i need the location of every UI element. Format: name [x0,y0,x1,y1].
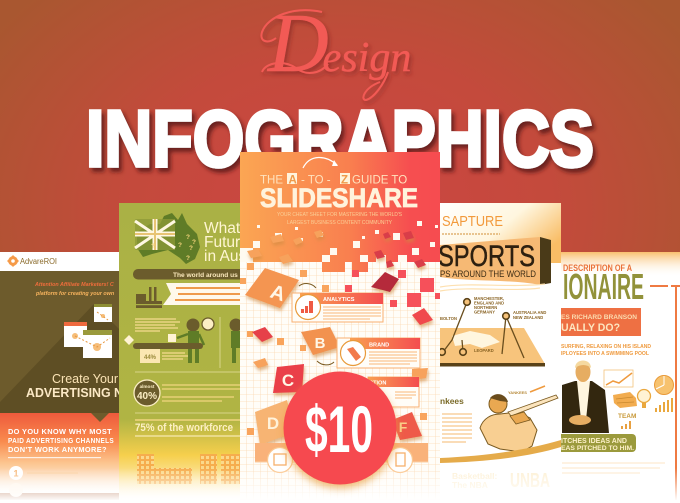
label: TEAM [618,413,636,429]
map platform with pins: AUSTRALIA AND [513,310,546,315]
arrow: A to analytics [299,284,316,288]
faded heading: Basketball: Basketball: [452,471,498,481]
map platform with pins: BOLTON [440,316,457,321]
map platform with pins: NORTHERN [474,305,497,310]
tile: A: A [267,281,288,306]
map of Australia with flag: ? [178,242,182,249]
illustration: baseball batter [480,386,558,452]
photo: Richard Branson [562,360,609,433]
intro text: Attention Affiliate Marketers! C [34,282,114,288]
banner: sports: SPORTS [438,240,535,273]
text: surfing: SURFING, RELAXING ON HIS ISLAND [561,344,651,350]
ribbon: revolution text [163,283,240,305]
stat: almost 40%: almost [140,384,155,389]
icon: light bulb [638,390,650,408]
decorative wave [440,440,561,463]
banner: sports [438,237,551,285]
tile: C [273,364,304,393]
panel: A to Z guide to SlideShare [240,152,440,503]
title: What Future in Aus [204,222,240,261]
faded heading: Basketball [452,473,550,488]
map platform with pins: NEW ZEALAND [513,315,543,320]
stat: almost 40%: 40% [137,391,157,402]
map of Australia with flag: ? [186,234,190,241]
icon: bars [655,398,673,412]
map of Australia with flag: ? [151,243,155,250]
tile: dark red [371,272,399,292]
heading: description of a billionaire [564,264,644,300]
title block: YOUR CHEAT SHEET FOR MASTERING THE WORLD'S [277,212,402,218]
tile: C: C [282,371,294,390]
factory worker scene: 44% [144,355,157,361]
title block: THE [260,174,283,186]
stat: 75% of the workforce: 75% of the workforce [135,422,233,434]
illustration: baseball batter: YANKEES [508,390,527,395]
title block [260,157,418,226]
heading: Yankees: nkees [440,396,464,406]
box: analytics [292,293,383,322]
tile: D: D [267,414,279,433]
intro text [34,282,115,297]
pixel squares [240,221,438,262]
tile: B: B [315,335,326,352]
pill: pitches ideas: EAS PITCHED TO HIM. [561,445,634,452]
title block: A [288,174,297,186]
map platform with pins: LEOPARD [474,348,494,353]
panel: Richard Branson billionaire [555,252,680,503]
numbered list: 1 [13,468,19,478]
tile: A [245,268,299,308]
map of Australia with flag: ? [189,245,193,252]
banner: what does he do: ES RICHARD BRANSON [561,314,637,321]
box: action: ACTION [365,380,386,386]
icon: pie chart [654,376,674,394]
pill: the world around us: The world around us is [173,272,246,279]
bottom section bar with icons [255,443,428,472]
numbered list [9,466,78,497]
faded heading: Basketball: UNBA [510,470,550,492]
map of Australia with flag [135,213,200,264]
map platform with pins: GERMANY [474,310,495,314]
factory worker scene [124,317,243,368]
panel: AdvareROI advertising network [0,252,123,497]
question text: DO YOU KNOW WHY MOST [8,427,112,436]
tile: D [255,400,295,445]
stat: almost 40% [134,380,240,406]
map of Australia with flag: ? [192,239,196,246]
title block: LARGEST BUSINESS CONTENT COMMUNITY [287,220,392,226]
illustration: growth chart [604,370,633,387]
arrow: B to brand [317,361,334,365]
box: brand [337,338,420,368]
tile: F: F [399,419,408,435]
icon: money [613,392,637,408]
question text [8,429,114,452]
faded heading: Basketball: The NBA [452,480,488,490]
logo: AdvareROI: AdvareROI [20,257,57,266]
title block: SLIDESHARE [260,183,418,213]
label: TEAM: TEAM [618,413,636,420]
text: Create Your Advertising Network [26,374,119,397]
box: action [365,377,419,407]
title block: - TO - [301,174,331,186]
body text [442,414,472,442]
panel: Sapture sports [438,203,561,503]
illustration: city buildings [137,454,240,484]
heading: description of a billionaire: DESCRIPTION OF A [563,263,632,274]
title: What Future in Aus: Futur [204,234,240,251]
logo: AdvareROI [7,255,57,267]
map platform with pins: ENGLAND AND [474,300,504,306]
tile: small red [252,327,273,342]
text: Create Your Advertising Network: Create Your [52,372,118,386]
panel: future of work in Australia [119,203,240,500]
banner: what does he do [561,308,641,336]
text: Create Your Advertising Network: ADVERTISING N [26,386,123,400]
tile: red [412,308,433,325]
logo: SAPTURE: SAPTURE [442,214,503,230]
title: What Future in Aus: What [204,220,241,237]
box: brand: BRAND [369,342,389,348]
title block: GUIDE TO [352,174,407,186]
tile: F [392,412,422,440]
pill: the world around us [133,269,240,280]
pill: pitches ideas: ITCHES IDEAS AND [561,436,627,445]
bottom white fade [0,468,680,501]
text: surfing: IPLOYEES INTO A SWIMMING POOL [561,351,650,357]
banner: sports: PS AROUND THE WORLD [440,269,536,280]
map of Australia with flag: ? [186,255,190,262]
pill: pitches ideas [555,434,636,452]
price badge: $10 [284,372,396,484]
text: surfing [561,344,651,355]
title block: Z [341,174,348,186]
icon: browser windows [64,304,112,358]
icon: factory [136,287,162,308]
question text: PAID ADVERTISING CHANNELS [8,436,114,445]
title: What Future in Aus: in Aus [204,248,246,265]
intro text: platform for creating your own [35,291,115,297]
price badge: $10: $10 [305,392,373,466]
box: analytics: ANALYTICS [323,297,355,303]
question text: DON'T WORK ANYMORE? [8,445,107,454]
map platform with pins: MANCHESTER, [474,296,504,301]
small scattered tiles [247,230,428,380]
banner: what does he do: UALLY DO? [561,322,620,334]
map platform with pins [439,296,546,366]
tile: B [301,327,340,355]
